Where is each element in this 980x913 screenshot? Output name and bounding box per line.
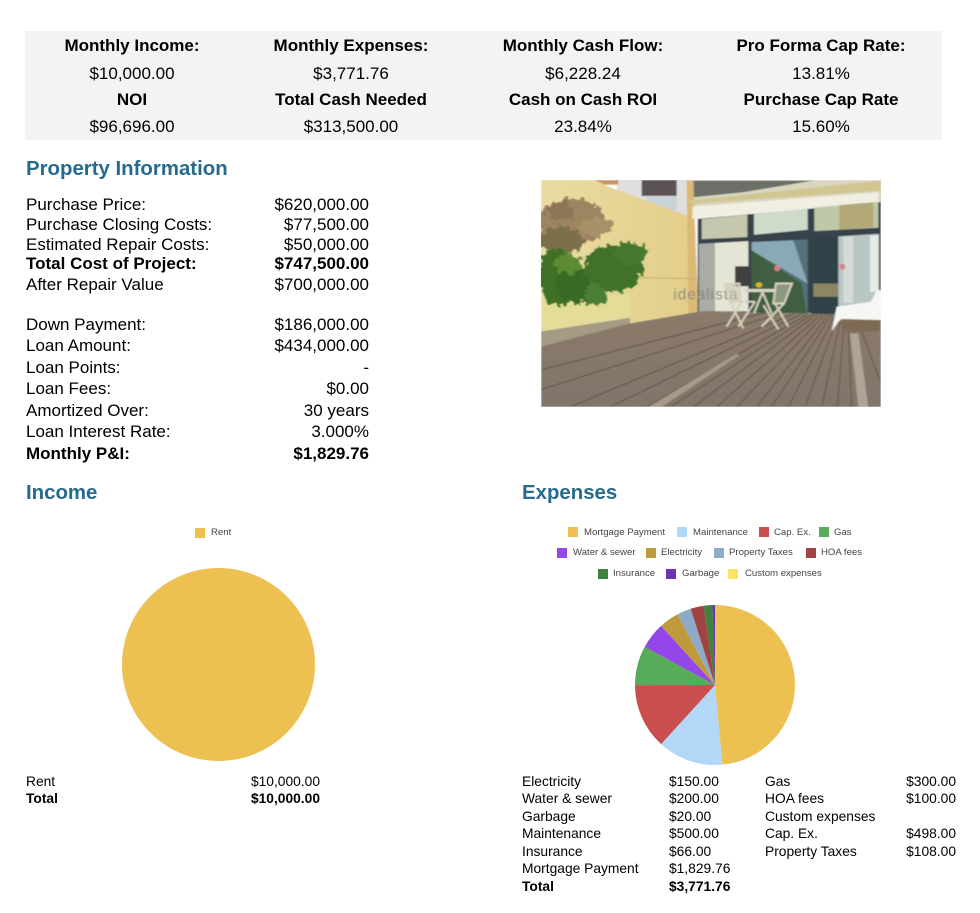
panel: property information table: After Repair Value [26,275,164,294]
panel: property information table: $434,000.00 [274,336,369,355]
panel: property information table: $0.00 [326,379,369,398]
table: expenses breakdown, first column: Garbage [522,809,576,824]
table: expenses breakdown, first column: Insurance [522,844,583,859]
legend: income: Rent [211,527,231,538]
metric: purchase cap rate [744,90,898,136]
chart: income pie [122,568,315,761]
table: expenses breakdown, second column: Gas [765,774,790,789]
panel: property information table: 3.000% [311,422,369,441]
table: expenses breakdown, first column: Electricity [522,774,581,789]
panel: property information table: Loan Fees: [26,379,111,398]
panel: key metrics summary [25,31,942,140]
legend: expenses: Maintenance [693,527,748,538]
table: expenses breakdown, first column: $200.00 [669,791,719,806]
table: expenses breakdown, second column: $108.00 [906,844,956,859]
table: expenses breakdown, second column: HOA fees [765,791,824,806]
table: expenses breakdown, first column: $1,829.76 [669,861,730,876]
panel: property information table: $620,000.00 [274,195,369,214]
panel: property information table: Loan Points: [26,358,121,377]
panel: property information table: $186,000.00 [274,315,369,334]
metric: monthly expenses: $3,771.76 [313,64,389,83]
metric: NOI: $96,696.00 [89,117,175,136]
table: expenses breakdown, first column: $500.00 [669,826,719,841]
panel: property information table: $77,500.00 [284,215,369,234]
panel: property information table: $747,500.00 [274,254,369,273]
table: income breakdown [26,774,320,806]
legend: expenses: HOA fees [821,547,862,558]
metric: pro forma cap rate: 13.81% [792,64,850,83]
heading: income: Income [26,482,97,504]
metric: NOI [89,90,175,136]
legend: expenses: Gas [834,527,852,538]
panel: property information table: Down Payment: [26,315,146,334]
metric: purchase cap rate: Purchase Cap Rate [744,90,898,109]
panel: property information table: 30 years [304,401,369,420]
table: expenses breakdown, first column: Mortgage Payment [522,861,639,876]
panel: property information table: $700,000.00 [274,275,369,294]
table: income breakdown: Rent [26,774,55,789]
panel: property information table: $50,000.00 [284,235,369,254]
heading: property information: Property Information [26,158,228,180]
metric: NOI: NOI [117,90,147,109]
legend: expenses: Insurance [613,568,655,579]
metric: cash on cash ROI: Cash on Cash ROI [509,90,657,109]
panel: property information table: Estimated Repair Costs: [26,235,209,254]
table: expenses breakdown, first column: $20.00 [669,809,711,824]
legend: expenses: Custom expenses [745,568,822,579]
legend: expenses: Garbage [682,568,719,579]
table: expenses breakdown, second column: Custom expenses [765,809,875,824]
panel: property information table [26,195,369,463]
panel: property information table: Loan Interest Rate: [26,422,171,441]
metric: monthly cash flow: Monthly Cash Flow: [503,36,663,55]
panel: property information table: Purchase Price: [26,195,146,214]
metric: monthly income: Monthly Income: [64,36,200,55]
metric: total cash needed: Total Cash Needed [275,90,427,109]
table: expenses breakdown, second column: $300.00 [906,774,956,789]
metric: purchase cap rate: 15.60% [792,117,850,136]
metric: cash on cash ROI: 23.84% [554,117,612,136]
metric: pro forma cap rate [736,36,906,83]
legend: expenses: Electricity [661,547,702,558]
metric: monthly expenses: Monthly Expenses: [274,36,428,55]
table: expenses breakdown, first column: Water & sewer [522,791,612,806]
chart: expenses pie [635,605,795,765]
panel: property information table: Loan Amount: [26,336,131,355]
metric: monthly cash flow [503,36,663,83]
metric: monthly income [64,36,200,83]
table: income breakdown: $10,000.00 [251,791,320,806]
metric: cash on cash ROI [509,90,657,136]
panel: property information table: $1,829.76 [293,444,369,463]
legend: expenses: Water & sewer [573,547,636,558]
metric: monthly expenses [274,36,428,83]
table: expenses breakdown, first column: Maintenance [522,826,601,841]
table: expenses breakdown, first column: $150.00 [669,774,719,789]
table: expenses breakdown, second column [765,774,956,859]
legend: expenses: Property Taxes [729,547,793,558]
watermark: idealista [673,287,739,303]
table: expenses breakdown, first column: $66.00 [669,844,711,859]
metric: monthly cash flow: $6,228.24 [545,64,621,83]
metric: total cash needed: $313,500.00 [304,117,398,136]
table: expenses breakdown, second column: $100.00 [906,791,956,806]
panel: property information table: Monthly P&I: [26,444,130,463]
table: expenses breakdown, second column: $498.00 [906,826,956,841]
table: expenses breakdown, second column: Cap. Ex. [765,826,818,841]
legend: income [195,527,232,538]
legend: expenses: Cap. Ex. [774,527,811,538]
metric: pro forma cap rate: Pro Forma Cap Rate: [736,36,906,55]
table: income breakdown: $10,000.00 [251,774,320,789]
heading: expenses: Expenses [522,482,617,504]
legend: expenses: Mortgage Payment [584,527,665,538]
panel: property information table: Amortized Over: [26,401,149,420]
panel: property information table: Purchase Closing Costs: [26,215,212,234]
metric: total cash needed [275,90,427,136]
table: expenses breakdown, first column [522,774,730,894]
photo: property terrace [541,180,881,407]
table: expenses breakdown, second column: Property Taxes [765,844,857,859]
table: expenses breakdown, first column: Total [522,879,554,894]
metric: monthly income: $10,000.00 [89,64,175,83]
legend: expenses [557,527,862,579]
table: expenses breakdown, first column: $3,771.76 [669,879,730,894]
panel: property information table: - [363,358,369,377]
table: income breakdown: Total [26,791,58,806]
panel: property information table: Total Cost of Project: [26,254,197,273]
